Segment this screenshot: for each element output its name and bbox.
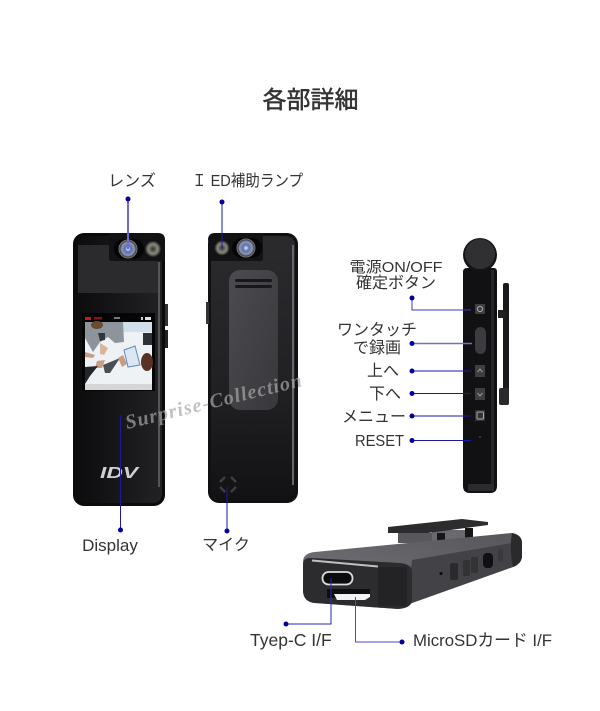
label: display [82,415,138,555]
label: one touch record: で録画 [353,339,401,357]
side face [407,543,513,604]
title: 各部詳細 [262,87,358,114]
label: power: 確定ボタン [356,274,436,292]
label: microSD [356,597,552,650]
logo: IDV [100,465,140,482]
label: power: 電源ON/OFF [350,259,442,276]
device: bottom view [303,519,522,609]
lens bar [208,233,263,261]
screen [82,313,155,391]
label: microSD: MicroSDカード I/F [413,631,552,650]
label: power [350,259,471,310]
label: menu: メニュー [342,409,406,426]
SD slot [327,589,370,600]
watermark: Surprise-Collection [123,370,304,434]
front face [303,558,412,609]
belt clip [229,270,278,410]
label: up [367,362,471,380]
microphone holes [220,477,236,492]
device: front view [73,233,168,506]
label: menu [342,409,471,426]
label: type-C: Tyep-C I/F [250,630,332,650]
label: LED light [192,172,303,248]
label: lens: レンズ [108,172,156,190]
label: down: 下へ [369,386,401,403]
top surface [303,533,522,609]
label: reset: RESET [355,433,404,450]
USB-C port [322,572,352,584]
label: one touch record: ワンタッチ [337,321,417,339]
label: microphone: マイク [202,536,250,554]
label: reset [355,433,471,450]
label: type-C [250,578,332,650]
label: display: Display [82,536,138,555]
label: microphone [202,487,250,554]
label: one touch record [337,321,472,357]
label: up: 上へ [367,362,399,380]
label: LED light: Ｉ ED補助ランプ [192,172,303,190]
label: down [369,386,471,403]
buttons [475,304,486,438]
lens bar [109,233,165,261]
device: back view [206,233,298,503]
label: lens [108,172,156,249]
device: side view [463,238,509,493]
clip [388,519,488,549]
lens head [463,238,497,272]
side buttons [440,549,503,580]
